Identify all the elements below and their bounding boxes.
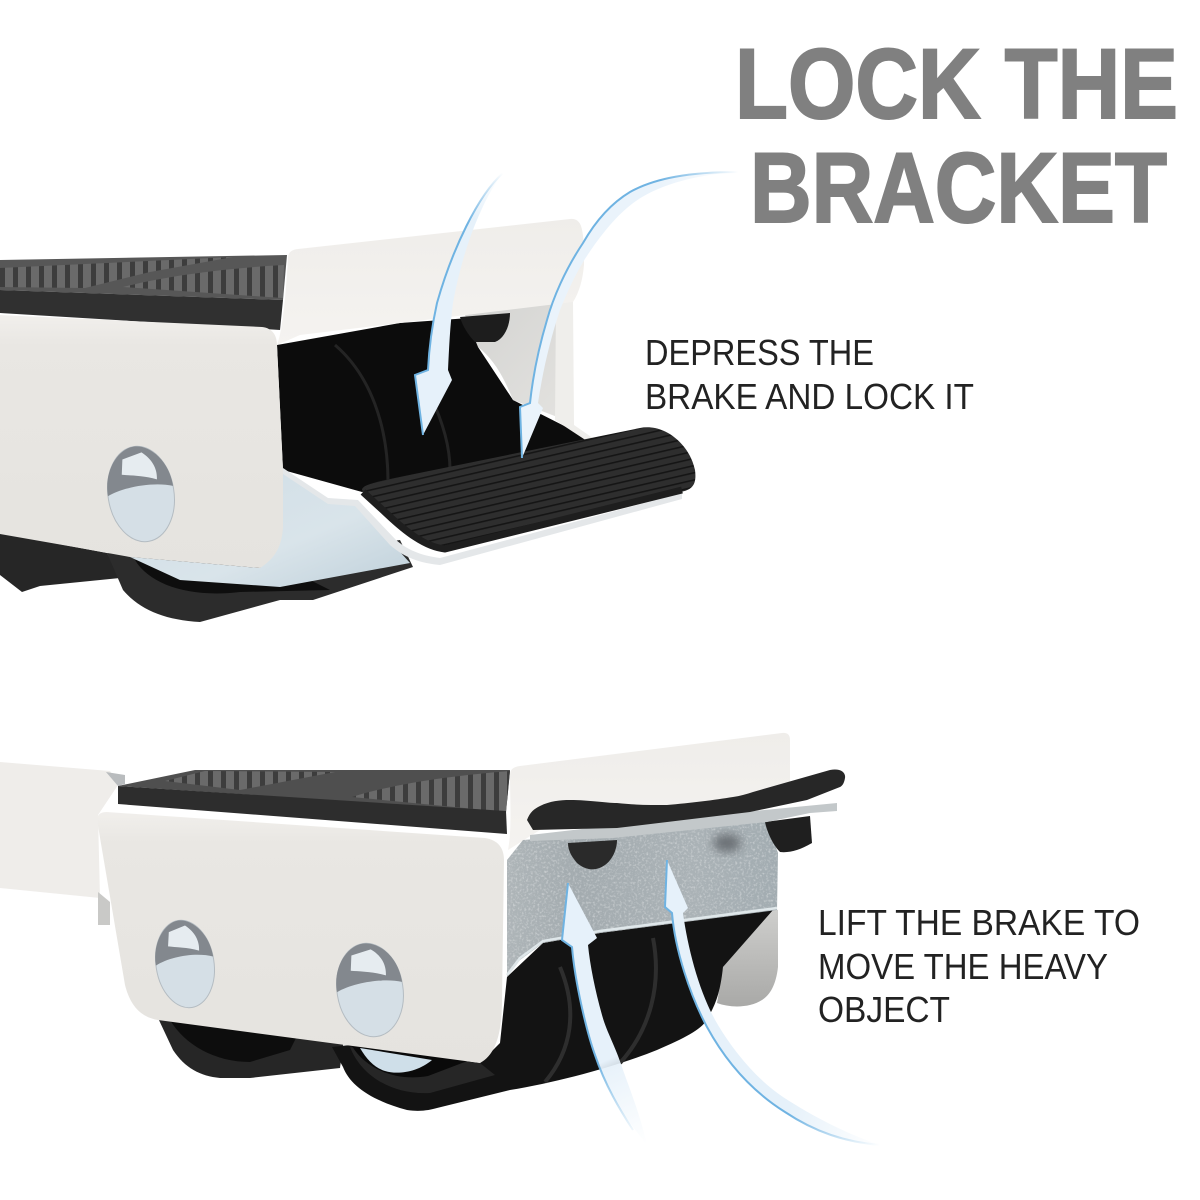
arrow: press brake pedal 1 xyxy=(415,173,503,435)
silver pedal plate xyxy=(530,803,837,841)
rail joint bottom xyxy=(98,892,110,925)
caption: depress the brake: DEPRESS THE xyxy=(645,332,874,373)
pedal rim xyxy=(363,490,682,549)
caption: lift the brake: OBJECT xyxy=(818,989,950,1030)
bracket lower highlight xyxy=(507,908,777,975)
brake pedal raised xyxy=(527,769,845,830)
side panel xyxy=(97,812,504,1063)
bracket shadow spot xyxy=(713,834,741,852)
back plate xyxy=(277,219,584,345)
zinc hub xyxy=(360,1048,432,1073)
back gray wall xyxy=(717,908,778,1006)
front wheel xyxy=(107,540,413,622)
caption: lift the brake: LIFT THE BRAKE TO xyxy=(818,902,1140,943)
wheel inner shadow xyxy=(135,560,330,593)
caption: lift the brake xyxy=(818,902,1140,1030)
side panel xyxy=(0,315,283,568)
pedal top tread xyxy=(0,255,287,300)
back plate xyxy=(508,733,790,850)
tread ridges right xyxy=(123,265,284,298)
wheel contours xyxy=(335,345,450,482)
zinc bracket below the body xyxy=(130,470,410,587)
caption: lift the brake: MOVE THE HEAVY xyxy=(818,946,1108,987)
wheel hub inner xyxy=(352,1046,470,1077)
tread ridges left xyxy=(0,257,233,288)
tread ridges right xyxy=(352,771,510,812)
extension rail xyxy=(0,762,118,898)
bolt xyxy=(101,441,181,547)
pedal front edge xyxy=(118,786,507,834)
right peg xyxy=(765,816,812,852)
silver pedal edge xyxy=(283,468,682,565)
wheel one xyxy=(158,1018,345,1078)
wheel one inner xyxy=(170,1020,300,1062)
bracket texture xyxy=(507,822,778,976)
bolt one xyxy=(149,916,221,1012)
rear wheel strip xyxy=(0,533,120,592)
rail joint top xyxy=(106,772,125,786)
product: unlocked caster unit xyxy=(0,733,845,1111)
zinc bracket xyxy=(507,822,778,977)
right inner wall xyxy=(465,301,573,423)
wheel rim band xyxy=(350,1047,495,1093)
arrow: lift brake 1 xyxy=(562,883,647,1145)
caption: depress the brake xyxy=(645,332,974,417)
wheel contour lines xyxy=(545,938,656,1082)
rear tread xyxy=(118,770,510,812)
product: locked caster unit xyxy=(0,219,695,622)
brake pedal lowered xyxy=(362,427,695,552)
title xyxy=(735,28,1178,243)
arrow: press brake pedal 2 xyxy=(520,172,738,458)
rear peg xyxy=(460,313,510,342)
left peg xyxy=(568,840,617,869)
pedal front edge xyxy=(0,290,283,330)
wheel body xyxy=(332,910,773,1111)
bolt two xyxy=(330,938,410,1042)
dark interior with wheels xyxy=(277,315,592,492)
tread ridges left xyxy=(165,771,335,790)
arrow: lift brake 2 xyxy=(665,860,880,1145)
wall bright rim xyxy=(555,301,597,443)
caption: depress the brake: BRAKE AND LOCK IT xyxy=(645,376,974,417)
